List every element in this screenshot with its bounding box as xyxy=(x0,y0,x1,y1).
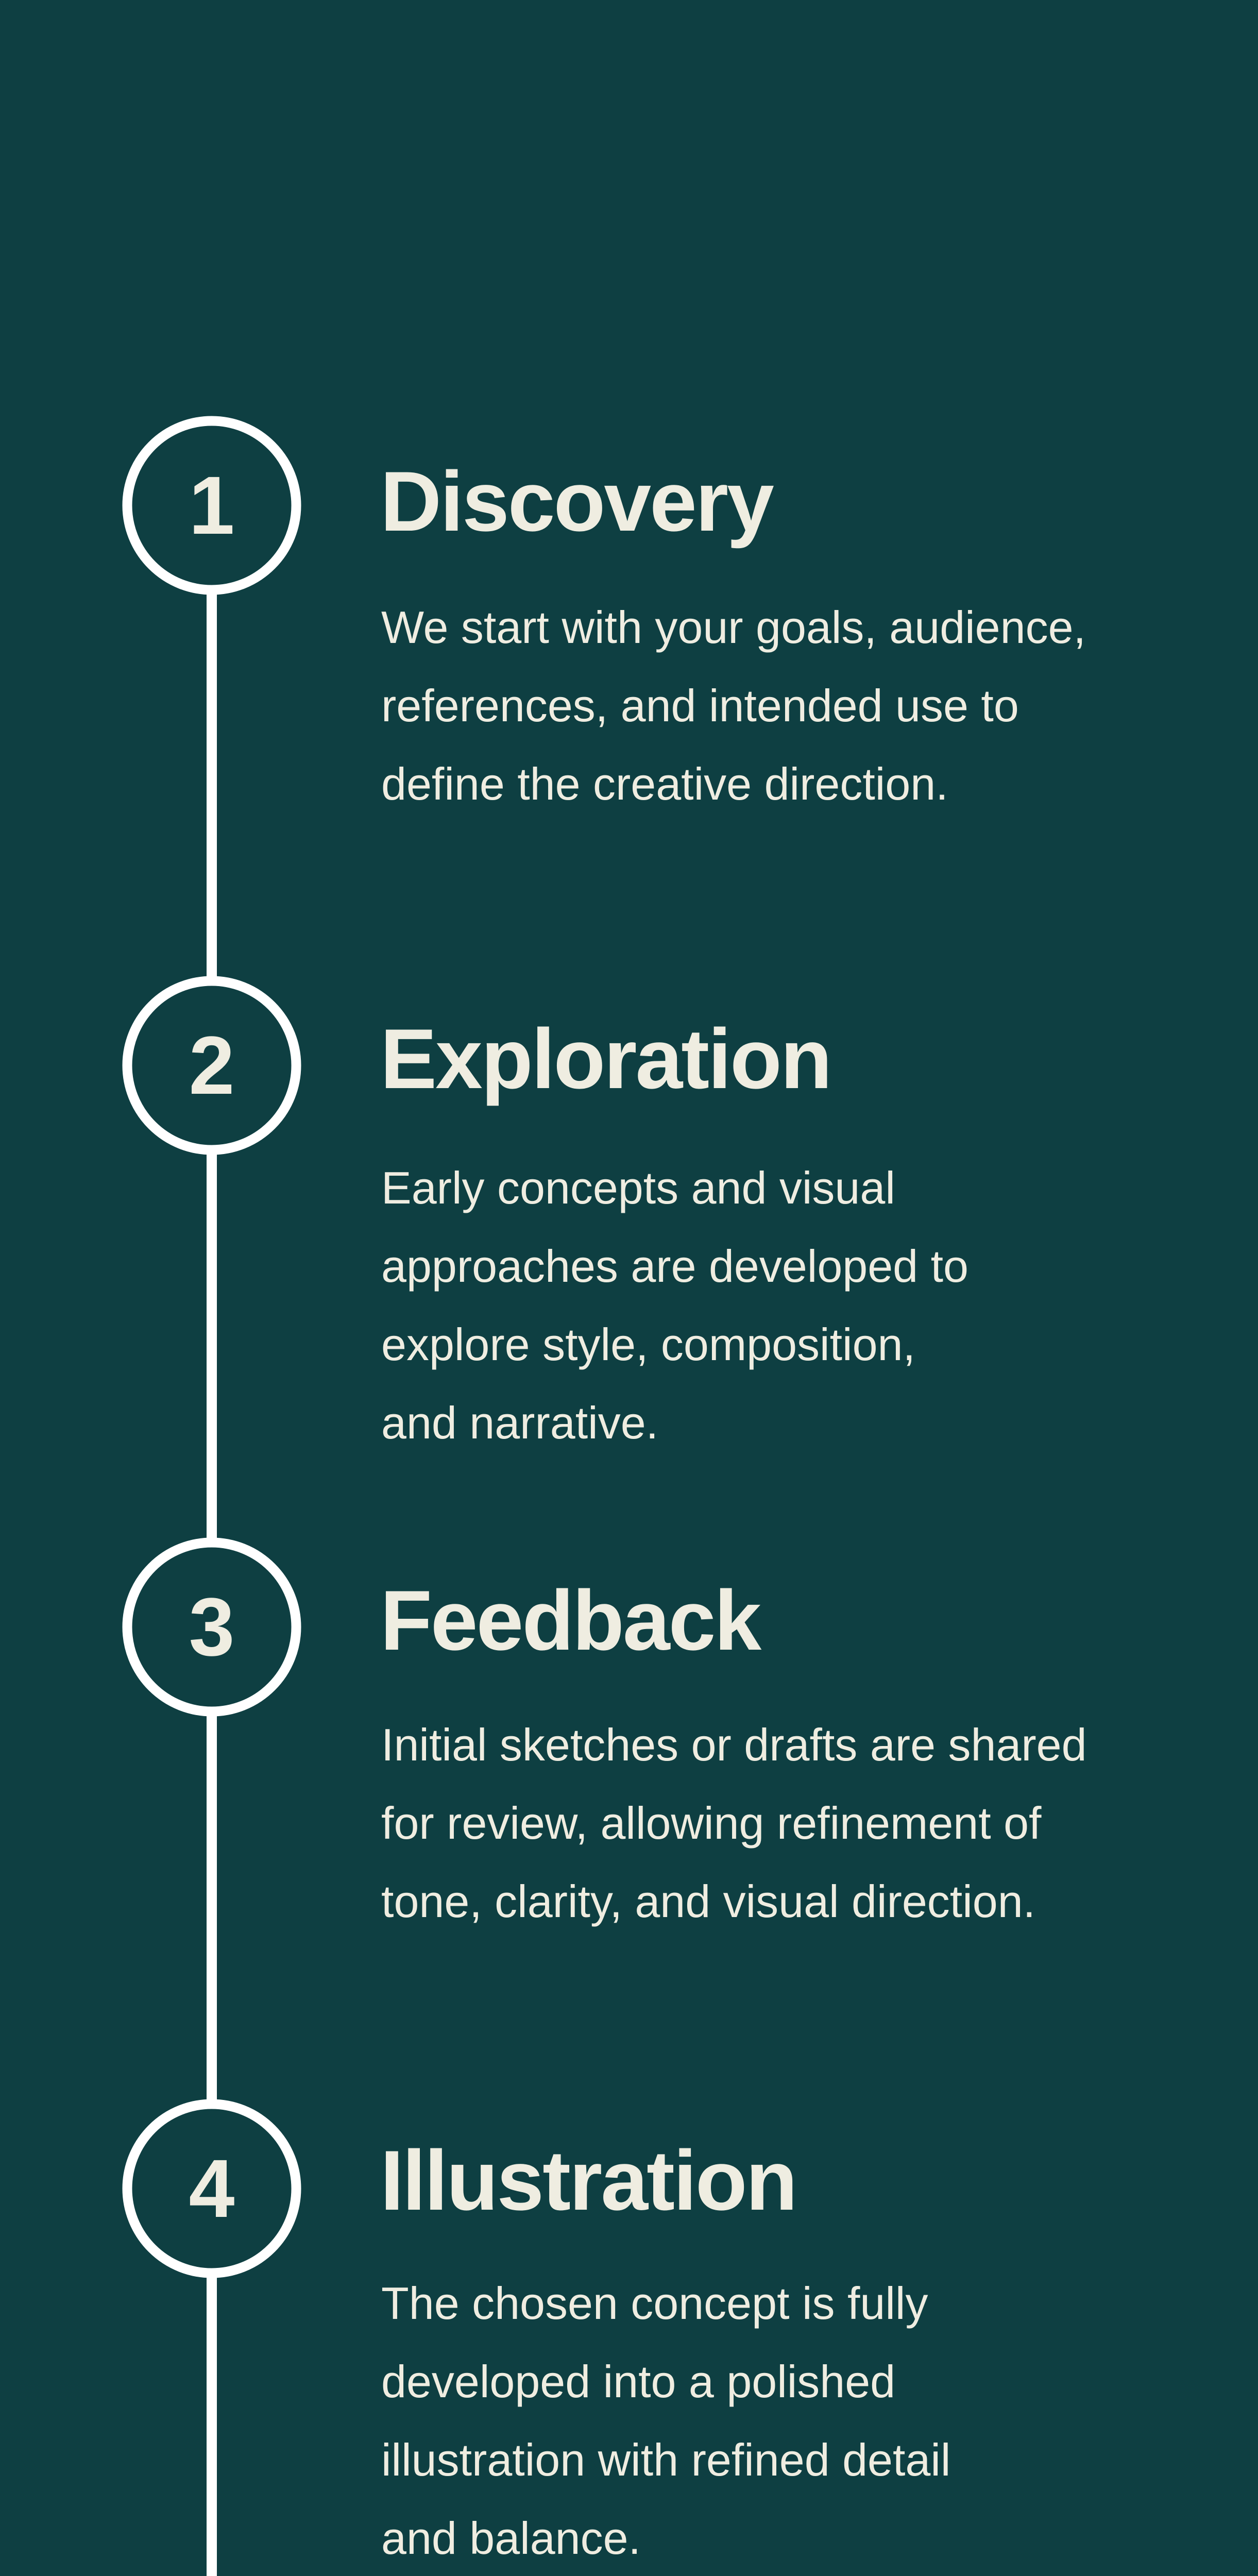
circle 2 xyxy=(127,981,296,1150)
number 2: 2 xyxy=(189,1019,234,1111)
text: Illustration description xyxy=(381,2278,950,2564)
title: Illustration: Illustration xyxy=(380,2133,796,2228)
circle 3 xyxy=(127,1543,296,1711)
circle 4 xyxy=(127,2104,296,2273)
text: Feedback description: tone, clarity, and visual direction. xyxy=(381,1876,1035,1927)
text: Illustration description: developed into a polished xyxy=(381,2356,895,2407)
text: Discovery description: define the creative direction. xyxy=(381,758,948,809)
text: Feedback description xyxy=(381,1719,1087,1927)
text: Illustration description: and balance. xyxy=(381,2513,641,2564)
timeline connector line xyxy=(207,592,217,2576)
text: Exploration description xyxy=(381,1162,968,1448)
text: Exploration description: Early concepts and visual xyxy=(381,1162,895,1213)
number 4: 4 xyxy=(189,2142,234,2234)
text: Exploration description: explore style, composition, xyxy=(381,1319,915,1370)
text: Exploration description: and narrative. xyxy=(381,1397,658,1448)
text: Illustration description: The chosen concept is fully xyxy=(381,2278,928,2329)
title: Feedback: Feedback xyxy=(380,1573,760,1668)
text: Feedback description: Initial sketches or drafts are shared xyxy=(381,1719,1087,1770)
text: Illustration description: illustration with refined detail xyxy=(381,2434,950,2485)
text: Discovery description: We start with your goals, audience, xyxy=(381,602,1086,653)
text: Exploration description: approaches are developed to xyxy=(381,1241,968,1292)
title: Exploration: Exploration xyxy=(380,1011,831,1106)
number 3: 3 xyxy=(189,1581,234,1673)
text: Feedback description: for review, allowing refinement of xyxy=(381,1798,1042,1849)
text: Discovery description: references, and intended use to xyxy=(381,680,1019,731)
title: Discovery: Discovery xyxy=(380,454,773,549)
circle 1 xyxy=(127,421,296,590)
number 1: 1 xyxy=(189,459,234,551)
text: Discovery description xyxy=(381,602,1086,809)
